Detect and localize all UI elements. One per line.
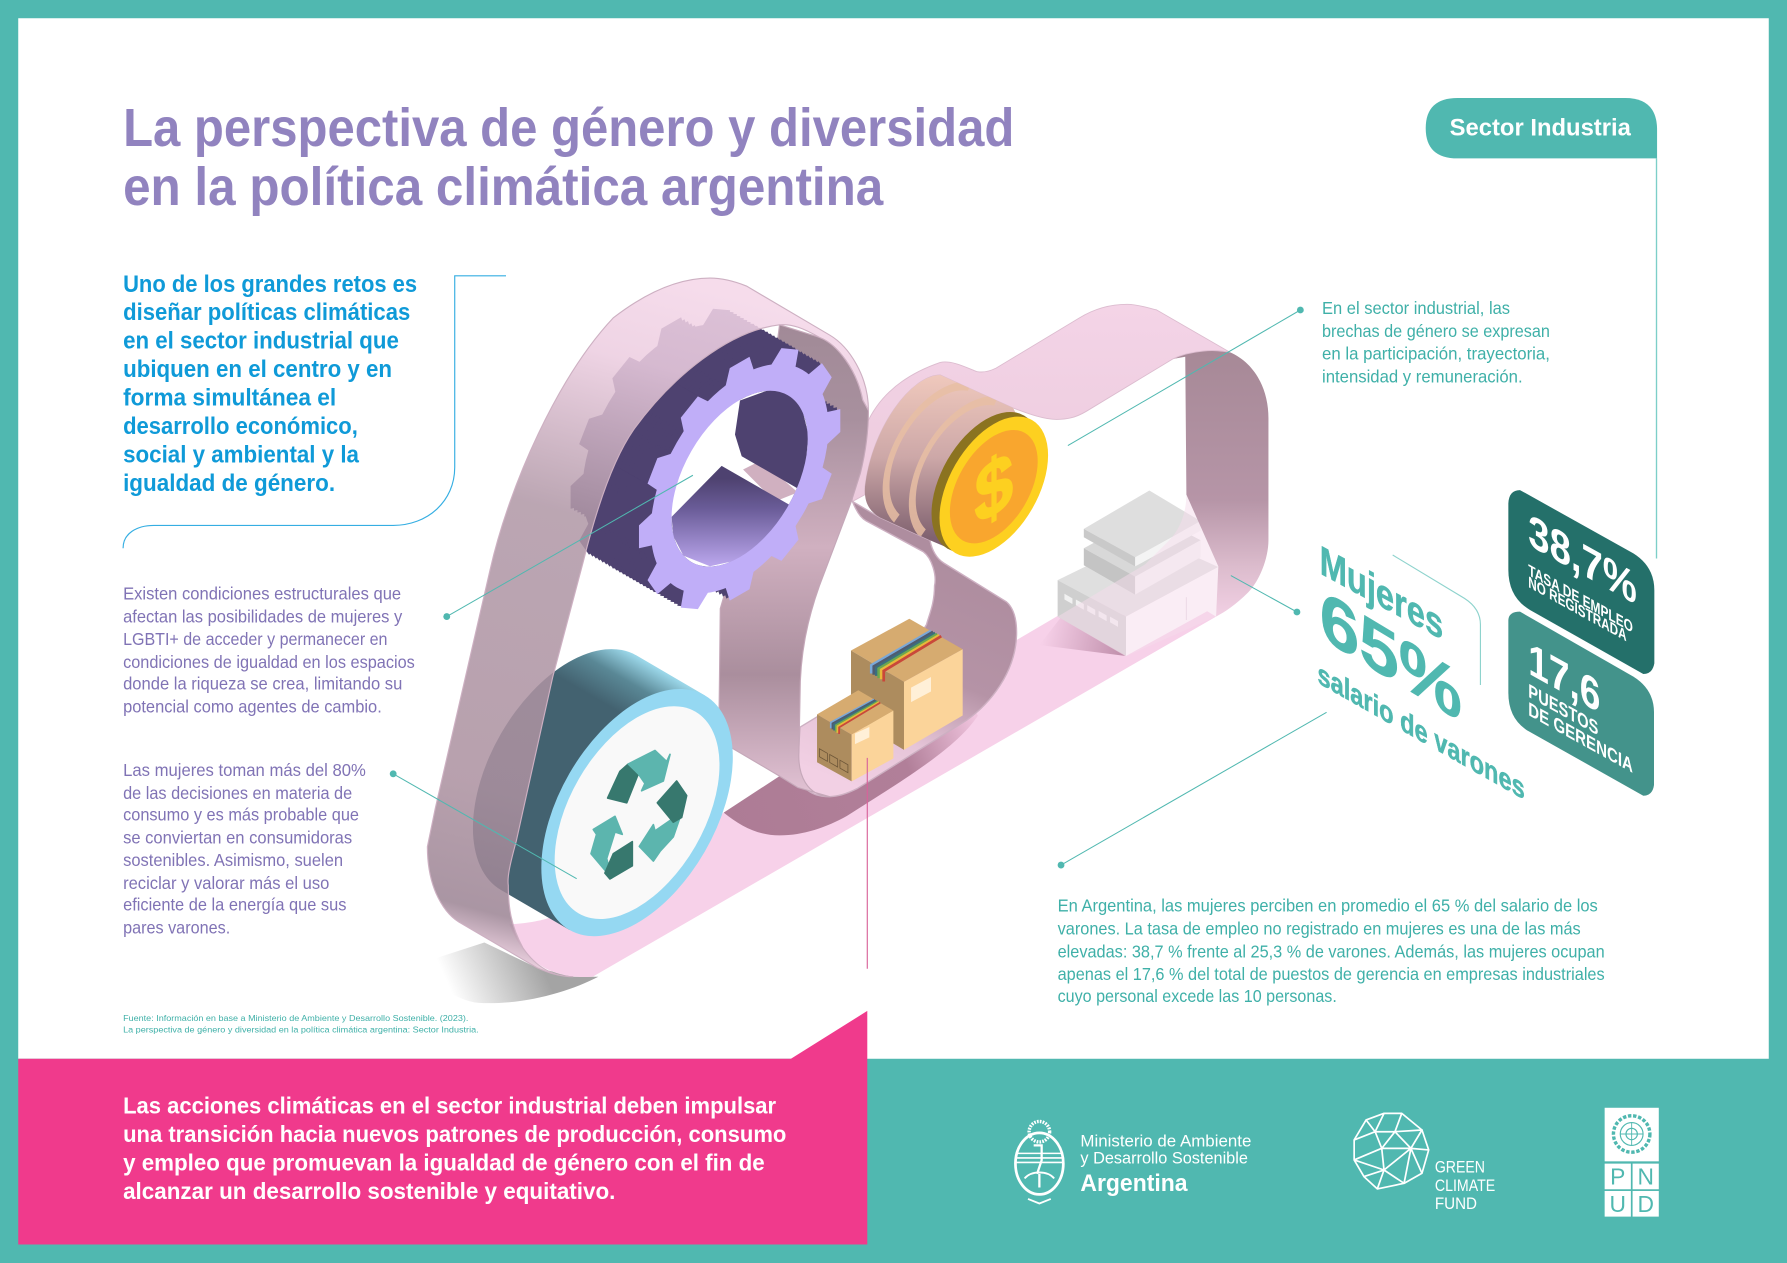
text block: sector gaps bbox=[1322, 299, 1550, 386]
ground shadow bbox=[410, 943, 598, 1003]
callout line: wheel bbox=[390, 770, 577, 879]
icon: Argentine coat of arms bbox=[1015, 1121, 1063, 1204]
text block: sector gaps: en la participación, trayectoria, bbox=[1322, 345, 1550, 364]
text block: sector gaps: intensidad y remuneración. bbox=[1322, 367, 1523, 386]
text block: wage gap: apenas el 17,6 % del total de puestos de gerencia en empresas industriales bbox=[1058, 965, 1605, 984]
icon: gear bbox=[571, 265, 840, 653]
source note: Fuente: Información en base a Ministerio de Ambiente y Desarrollo Sostenible. (2023). bbox=[123, 1013, 468, 1023]
text block: sector gaps: brechas de género se expresan bbox=[1322, 322, 1550, 341]
lead paragraph: desarrollo económico, bbox=[123, 413, 358, 440]
text block: wage gap: varones. La tasa de empleo no registrado en mujeres es una de las más bbox=[1058, 920, 1581, 939]
belt: translucent veil over building bbox=[1058, 495, 1218, 656]
lead paragraph bbox=[123, 271, 417, 497]
icon: recycling arrows bbox=[591, 750, 687, 879]
panel: pink conclusion: Las acciones climáticas en el sector industrial deben impulsar bbox=[123, 1092, 776, 1118]
text block: women consumers: se conviertan en consumidoras bbox=[123, 828, 352, 847]
belt floor bbox=[509, 570, 1216, 977]
belt: right loop bbox=[1173, 351, 1268, 617]
statistic card: 38,7% bbox=[1508, 490, 1654, 674]
floor shadow bbox=[724, 695, 978, 835]
text block: wage gap: elevadas: 38,7 % frente al 25,3 % de varones. Además, las mujeres ocupan bbox=[1058, 942, 1605, 961]
text block: structural conditions: LGBTI+ de acceder y permanecer en bbox=[123, 630, 387, 649]
text block: wage gap bbox=[1058, 897, 1605, 1006]
intro bracket line bbox=[123, 276, 506, 548]
text block: structural conditions: potencial como agentes de cambio. bbox=[123, 697, 382, 716]
logo: Ministerio de Ambiente: Ministerio de Ambiente bbox=[1080, 1132, 1251, 1151]
statistic card: 38,7%: 38,7% bbox=[1528, 504, 1637, 615]
belt: lower S curve bbox=[798, 501, 1017, 797]
lead paragraph: forma simultánea el bbox=[123, 385, 336, 412]
panel: pink conclusion: y empleo que promuevan la igualdad de género con el fin de bbox=[123, 1149, 765, 1175]
statistic: women 65 percent: Mujeres bbox=[1320, 536, 1443, 649]
lead paragraph: Uno de los grandes retos es bbox=[123, 271, 417, 298]
statistic card: 38,7%: NO REGISTRADA bbox=[1528, 574, 1627, 646]
panel: pink conclusion bbox=[18, 1011, 867, 1245]
text block: structural conditions: condiciones de igualdad en los espacios bbox=[123, 653, 415, 672]
lead paragraph: social y ambiental y la bbox=[123, 442, 360, 469]
text block: wage gap: En Argentina, las mujeres perciben en promedio el 65 % del salario de los bbox=[1058, 897, 1598, 916]
text block: structural conditions: donde la riqueza se crea, limitando su bbox=[123, 675, 402, 694]
title: La perspectiva de género y diversidad bbox=[123, 99, 1014, 158]
logo: Green Climate Fund: CLIMATE bbox=[1435, 1176, 1495, 1195]
lead paragraph: ubiquen en el centro y en bbox=[123, 356, 392, 383]
icon: small box bbox=[817, 690, 893, 781]
sector badge bbox=[1426, 98, 1657, 558]
icon: geodesic dome bbox=[1354, 1113, 1429, 1189]
text block: structural conditions: afectan las posibilidades de mujeres y bbox=[123, 607, 403, 626]
salary bracket line bbox=[1393, 555, 1480, 685]
text block: women consumers: consumo y es más probable que bbox=[123, 806, 359, 825]
logo: Green Climate Fund bbox=[1354, 1113, 1495, 1213]
callout line: factory bbox=[1231, 576, 1300, 615]
text block: women consumers: reciclar y valorar más el uso bbox=[123, 874, 329, 893]
lead paragraph: en el sector industrial que bbox=[123, 328, 399, 355]
logo: PNUD bbox=[1605, 1108, 1659, 1217]
pink connector line bbox=[866, 758, 868, 969]
lead paragraph: igualdad de género. bbox=[123, 470, 335, 497]
title bbox=[123, 99, 1014, 217]
icon: coin on drum: $ bbox=[975, 432, 1013, 543]
logo: PNUD: N bbox=[1637, 1164, 1654, 1190]
statistic card: 17,6: 17,6 bbox=[1528, 632, 1600, 723]
belt: top strip bbox=[852, 304, 1230, 501]
logo: PNUD: U bbox=[1610, 1191, 1626, 1217]
sector badge: Sector Industria bbox=[1450, 115, 1631, 142]
text block: wage gap: cuyo personal excede las 10 personas. bbox=[1058, 987, 1337, 1006]
belt: left loop bbox=[427, 278, 868, 977]
text block: structural conditions bbox=[123, 584, 415, 716]
panel: pink conclusion: una transición hacia nuevos patrones de producción, consumo bbox=[123, 1121, 786, 1147]
text block: women consumers: sostenibles. Asimismo, suelen bbox=[123, 851, 343, 870]
text block: sector gaps: En el sector industrial, las bbox=[1322, 299, 1510, 318]
text block: women consumers: eficiente de la energía que sus bbox=[123, 896, 346, 915]
text block: women consumers: pares varones. bbox=[123, 918, 230, 937]
logo: Green Climate Fund: FUND bbox=[1435, 1194, 1477, 1213]
text block: women consumers: Las mujeres toman más del 80% bbox=[123, 761, 366, 780]
logo: Ministerio de Ambiente bbox=[1015, 1121, 1251, 1204]
conveyor belt illustration bbox=[410, 265, 1268, 1003]
text block: women consumers: de las decisiones en materia de bbox=[123, 784, 352, 803]
text block: structural conditions: Existen condiciones estructurales que bbox=[123, 584, 401, 603]
statistic card: 17,6 bbox=[1508, 612, 1654, 796]
callout line: coin bbox=[1068, 307, 1304, 446]
statistic: women 65 percent: salario de varones bbox=[1317, 657, 1525, 807]
statistic card: 17,6: PUESTOS bbox=[1528, 681, 1598, 741]
statistic card: 17,6: DE GERENCIA bbox=[1528, 699, 1633, 778]
statistic: women 65 percent: 65% bbox=[1320, 574, 1462, 738]
callout line: salary text bbox=[1058, 712, 1327, 868]
logo: PNUD: P bbox=[1610, 1164, 1625, 1190]
title: en la política climática argentina bbox=[123, 158, 884, 217]
text block: women consumers bbox=[123, 761, 366, 937]
statistic card: 38,7%: TASA DE EMPLEO bbox=[1528, 562, 1633, 637]
icon: large box bbox=[851, 619, 963, 750]
lead paragraph: diseñar políticas climáticas bbox=[123, 299, 410, 326]
logo: Green Climate Fund: GREEN bbox=[1435, 1158, 1485, 1177]
panel: pink conclusion: alcanzar un desarrollo sostenible y equitativo. bbox=[123, 1178, 615, 1204]
logo: PNUD: D bbox=[1637, 1191, 1654, 1217]
logo: Ministerio de Ambiente: Argentina bbox=[1080, 1170, 1188, 1197]
icon: factory building bbox=[1058, 491, 1218, 656]
logo: Ministerio de Ambiente: y Desarrollo Sostenible bbox=[1080, 1149, 1248, 1168]
building shadow bbox=[1039, 604, 1125, 656]
icon: recycling wheel bbox=[473, 647, 733, 978]
belt: middle band bbox=[719, 325, 868, 797]
source note bbox=[123, 1013, 479, 1035]
icon: UN emblem bbox=[1613, 1116, 1650, 1152]
callout line: gear bbox=[443, 475, 693, 620]
source note: La perspectiva de género y diversidad en la política climática argentina: Sector Industria. bbox=[123, 1025, 479, 1035]
statistic: women 65 percent bbox=[1317, 536, 1525, 807]
icon: coin on drum bbox=[864, 375, 1048, 557]
